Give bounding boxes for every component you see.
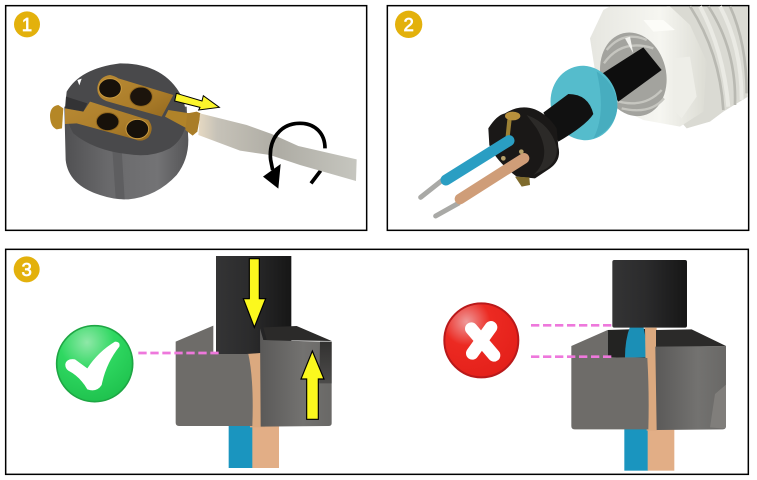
arrow: up (301, 351, 324, 419)
correct assembly (57, 256, 332, 468)
icon: gland body (590, 6, 748, 128)
panel 2: cable assembly into gland (387, 6, 749, 230)
icon: copper wire (436, 158, 524, 216)
inner cavity (608, 329, 648, 358)
step badge 3 (14, 256, 40, 282)
black cable (612, 260, 687, 328)
blue wire (229, 425, 253, 468)
icon: screwdriver (198, 113, 357, 181)
blue wire bend (625, 327, 647, 357)
arrow tail: rotation behind driver (311, 171, 321, 183)
arrow: down (243, 259, 266, 327)
panel 1: loosening clamp screw (6, 6, 367, 230)
icon: clamp body (64, 63, 188, 199)
icon: blue wire (421, 141, 509, 197)
black cable (216, 256, 291, 355)
icon: black cable to clamp (543, 94, 593, 142)
right block (655, 329, 726, 430)
tan wire lower (648, 428, 674, 471)
icon: red cross (444, 303, 518, 377)
tan wire inside (645, 328, 657, 431)
step badge 2 (395, 11, 422, 38)
pink guide line (138, 349, 220, 357)
step badge 3: 3 (21, 259, 32, 280)
pink guide lines (531, 325, 612, 357)
tan wire inside (247, 353, 265, 427)
right block (260, 326, 332, 427)
step badge 1 (14, 11, 40, 37)
step badge 2: 2 (403, 14, 414, 35)
icon: teal ring (545, 60, 623, 146)
icon: brass plates and screws (50, 75, 201, 141)
left block (176, 326, 253, 426)
arrow: yellow outward (175, 93, 219, 110)
incorrect assembly (444, 260, 726, 471)
panel 3: correct and incorrect fitting (6, 249, 748, 474)
icon: black cable into gland (600, 47, 662, 102)
left block (571, 330, 649, 429)
arrow: rotation (263, 123, 325, 189)
step badge 1: 1 (22, 14, 32, 35)
blue wire (624, 428, 648, 471)
icon: green check (57, 326, 133, 402)
icon: black clamp (488, 107, 559, 187)
tan wire lower (252, 425, 279, 468)
